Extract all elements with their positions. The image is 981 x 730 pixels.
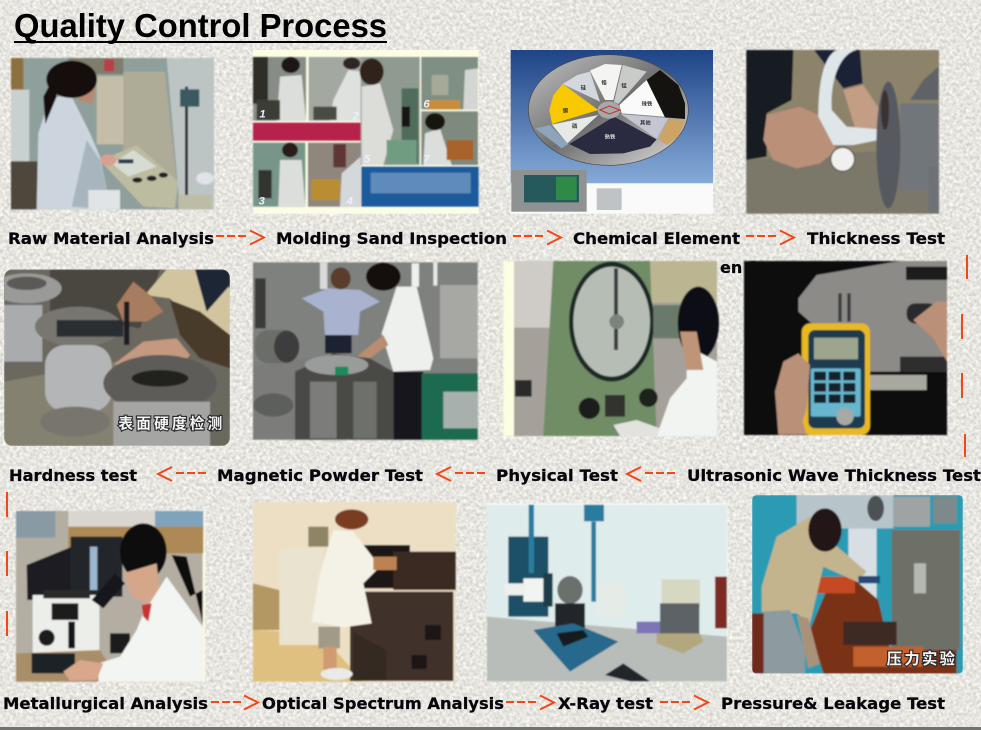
photo: chemical element analyser wheel (511, 50, 713, 214)
caption: Pressure & Leakage Test: Pressure& Leakage Test (721, 694, 945, 713)
photo: ultrasonic thickness gauge (744, 261, 947, 435)
diagram: element wheel: 硅 (581, 84, 587, 92)
photo: physical test machine (503, 261, 719, 436)
stamped caption in photo: 表面硬度检测 (118, 414, 222, 432)
caption: Molding Sand Inspection: Molding Sand Inspection (276, 229, 507, 248)
photo: magnetic powder test (253, 262, 478, 440)
icon: spectrometer console (511, 170, 622, 212)
bottom grey edge band (0, 727, 981, 730)
caption: Physical Test: Physical Test (496, 466, 618, 485)
photo: hardness test (0, 269, 230, 446)
stamped caption in photo: 压力实验 (887, 650, 956, 668)
diagram: element wheel: 其他 (640, 119, 651, 127)
diagram: element wheel: 钢 (563, 106, 569, 114)
caption: Ultrasonic Wave Thickness Test: Ultrasonic Wave Thickness Test (687, 466, 981, 485)
photo: molding sand inspection collage: 6 (423, 98, 430, 110)
photo: molding sand inspection collage: 3 (259, 196, 266, 208)
photo: molding sand inspection collage (253, 50, 479, 214)
caption: Metallurgical Analysis: Metallurgical Analysis (3, 694, 208, 713)
arrow: chemical element to thickness test (746, 230, 794, 244)
photo: optical spectrum analysis (253, 502, 456, 682)
caption: X-Ray test: X-Ray test (558, 694, 653, 713)
photo: pressure and leakage test (752, 495, 963, 674)
arrow: physical to magnetic powder (437, 467, 485, 481)
caption: Hardness test: Hardness test (9, 466, 137, 485)
photo: molding sand inspection collage: 2 (352, 110, 360, 122)
arrow: magnetic powder to hardness (158, 467, 206, 481)
photo: molding sand inspection collage: 1 (259, 108, 266, 120)
arrow: raw material to molding sand (216, 230, 264, 244)
arrow: molding sand to chemical element (513, 230, 561, 244)
photo: molding sand inspection collage: 5 (364, 154, 371, 166)
photo: molding sand inspection collage: 4 (346, 196, 354, 208)
photo: metallurgical analysis (16, 511, 205, 682)
photo: raw material analysis (11, 58, 214, 209)
caption: Thickness Test: Thickness Test (807, 229, 945, 248)
arrow: vertical dashed connector, right side (961, 255, 968, 457)
diagram: element wheel: 珠铁 (642, 99, 653, 107)
caption: Raw Material Analysis: Raw Material Analysis (8, 229, 214, 248)
diagram: element wheel (528, 55, 688, 165)
caption: Magnetic Powder Test: Magnetic Powder Test (217, 466, 423, 485)
caption: Chemical Element: Chemical Element (573, 229, 740, 248)
diagram: element wheel: 磷 (572, 122, 578, 130)
title: Quality Control Process (14, 7, 387, 44)
caption: Optical Spectrum Analysis: Optical Spectrum Analysis (262, 694, 504, 713)
diagram: element wheel: 熟铁 (605, 133, 616, 141)
photo: molding sand inspection collage: 7 (423, 154, 430, 166)
diagram: element wheel: 铬 (601, 79, 607, 87)
partly hidden caption fragment: en 1 (720, 258, 759, 277)
photo: X-ray test room (487, 503, 728, 682)
arrow: X-ray to pressure and leakage (660, 696, 708, 710)
photo: thickness test with caliper (746, 50, 939, 214)
arrow: optical spectrum to X-ray (506, 696, 554, 710)
arrow: vertical dashed connector, left side (6, 492, 8, 636)
diagram: element wheel: 锰 (621, 82, 627, 90)
arrow: metallurgical to optical spectrum (211, 696, 258, 710)
arrow: ultrasonic to physical (627, 467, 675, 481)
